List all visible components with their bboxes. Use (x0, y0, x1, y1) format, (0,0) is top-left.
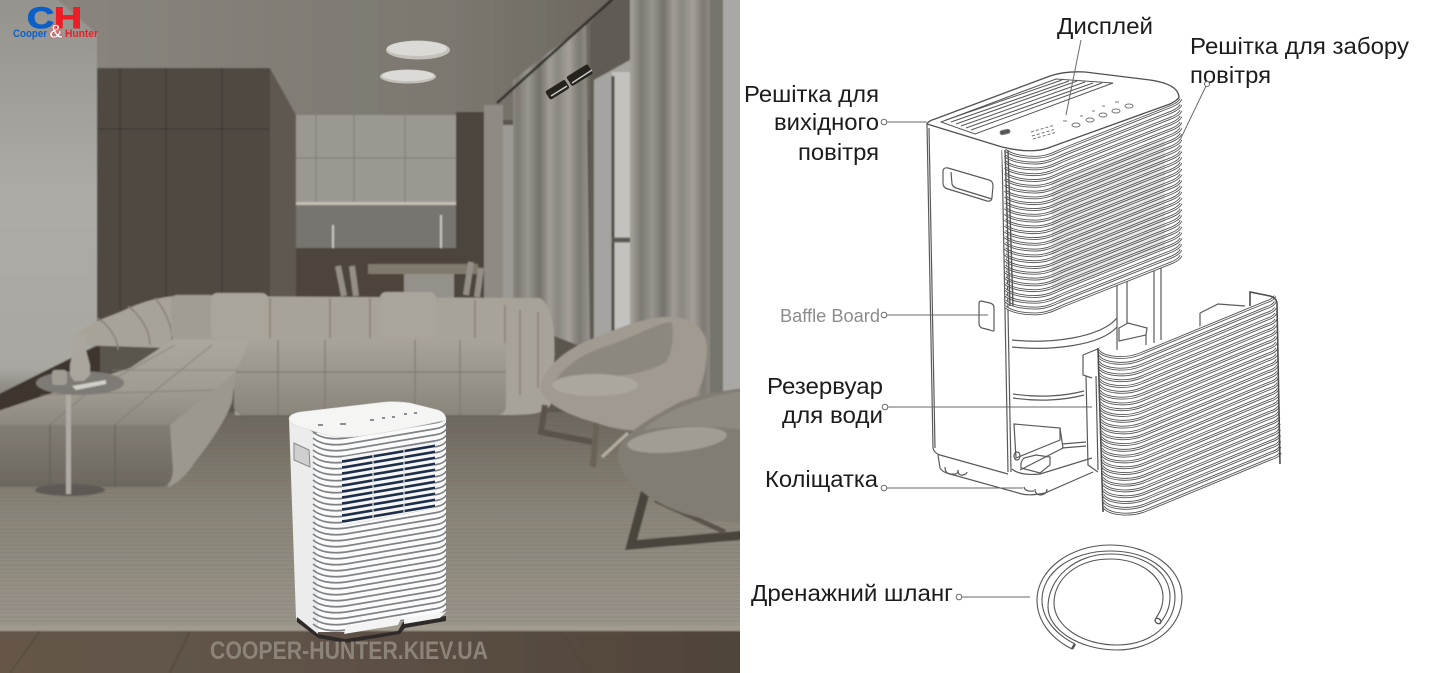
panel: living room photo (0, 0, 745, 673)
chaise top (0, 347, 236, 426)
label: wheel (765, 466, 1023, 492)
dark floor behind sofa (0, 346, 100, 410)
control panel marks (318, 413, 417, 425)
upper air intake grille (1002, 97, 1182, 314)
logo letters: C (27, 2, 54, 35)
label: water tank (767, 373, 1092, 428)
label: outlet grille: Решітка для (744, 81, 879, 107)
brand logo: Hunter (65, 28, 99, 40)
label: display (1057, 13, 1153, 115)
label: water tank: Резервуар (767, 373, 883, 399)
right seat cushions (233, 360, 370, 416)
side handle (943, 168, 993, 201)
product photo: white dehumidifier (289, 402, 446, 643)
white foot tabs (344, 612, 446, 634)
curtains (484, 0, 710, 400)
label: outlet grille: вихідного (774, 109, 879, 135)
brand logo (13, 6, 98, 40)
label: drain hose (751, 580, 1030, 606)
label: intake grille (1180, 33, 1410, 140)
water tank interior (1012, 268, 1161, 473)
right wall and window (503, 0, 745, 420)
rug (0, 412, 745, 631)
sofa (0, 292, 554, 487)
baffle board (979, 301, 994, 331)
top cover (289, 402, 446, 437)
room background (0, 0, 745, 673)
label: wheel: Коліщатка (765, 466, 878, 492)
pillows (170, 294, 212, 336)
display and buttons (1000, 102, 1133, 139)
brand logo: H (54, 2, 82, 35)
blue intake grille (342, 442, 435, 526)
label: outlet grille (744, 81, 927, 165)
detached grille panel (1098, 292, 1280, 514)
top cover with outlet vent and display (927, 72, 1179, 151)
wheels (945, 467, 1047, 495)
side panel (289, 419, 318, 634)
sofa back and arm (73, 296, 554, 415)
body outline (927, 124, 1093, 495)
ceiling track (497, 0, 615, 103)
track spotlights (545, 64, 593, 100)
diagram: drain hose (1037, 545, 1182, 650)
front body (314, 419, 446, 632)
label: water tank: для води (782, 402, 883, 428)
panel: parts diagram (744, 13, 1410, 650)
chaise right side (168, 372, 236, 487)
panel rear clip (1200, 304, 1245, 329)
ceiling (57, 0, 610, 120)
slats (313, 417, 446, 631)
kitchen (296, 112, 493, 304)
outlet vent lines (941, 79, 1113, 134)
armchair front (618, 388, 745, 545)
label: drain hose: Дренажний шланг (751, 580, 953, 606)
brand logo: & (49, 22, 63, 43)
diagram: dehumidifier body (927, 72, 1280, 514)
feet and shadow (297, 616, 446, 643)
label: display: Дисплей (1057, 13, 1153, 39)
label: baffle board: Baffle Board (780, 306, 880, 326)
watermark: COOPER-HUNTER.KIEV.UA (210, 637, 488, 665)
label: intake grille: повітря (1190, 62, 1271, 88)
ceiling lights (380, 40, 450, 84)
side table with vases (35, 335, 124, 496)
label: baffle board (780, 306, 988, 326)
label: intake grille: Решітка для забору (1190, 33, 1410, 59)
label: outlet grille: повітря (798, 139, 879, 165)
left wall (0, 0, 97, 396)
armchair back (540, 317, 707, 467)
logo wordmark: Cooper (13, 28, 48, 40)
handle recess (294, 443, 310, 467)
chaise front (0, 425, 173, 487)
wood wall panels (97, 68, 296, 318)
wood floor (0, 631, 745, 673)
